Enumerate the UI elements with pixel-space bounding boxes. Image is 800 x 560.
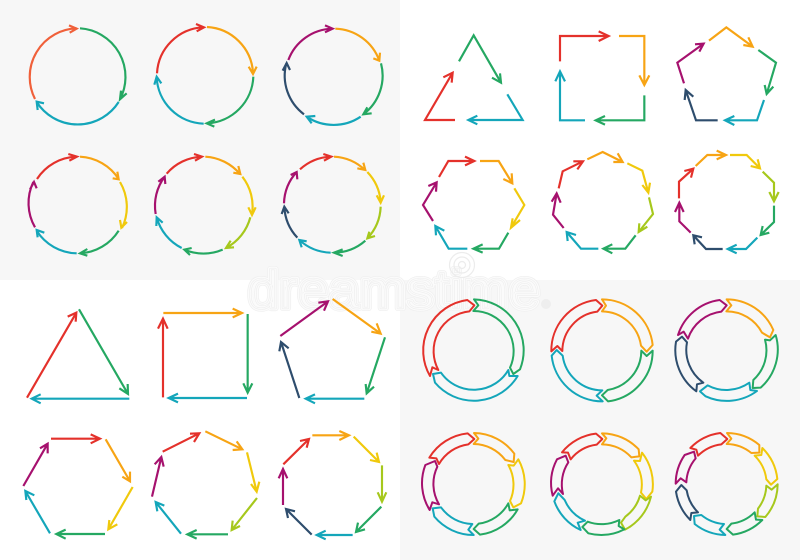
arrow: teal bbox=[37, 102, 119, 124]
arrow: teal bbox=[468, 94, 523, 124]
arrow: green bbox=[334, 241, 365, 256]
block arrow: red bbox=[423, 300, 474, 376]
block arrow: orange bbox=[602, 299, 653, 352]
diagram: circle with 5 arrows bbox=[283, 25, 383, 125]
arrow: green bbox=[80, 231, 119, 256]
block arrow: red bbox=[551, 300, 602, 351]
arrow: green bbox=[459, 35, 501, 83]
arrow: purple bbox=[29, 182, 37, 227]
arrow: red bbox=[425, 73, 455, 120]
arrow: teal bbox=[435, 226, 467, 249]
arrow: green bbox=[184, 248, 223, 255]
arrow: yellow bbox=[730, 155, 760, 168]
arrow: orange bbox=[80, 157, 119, 179]
diagram: circle with 6 arrows bbox=[29, 154, 127, 256]
arrow: purple bbox=[279, 469, 287, 505]
diagram: octagon bbox=[675, 151, 779, 253]
diagram: triangle bbox=[425, 35, 523, 124]
block arrow: green bbox=[727, 512, 762, 535]
arrow: teal bbox=[725, 100, 764, 125]
arrow: purple bbox=[155, 177, 165, 214]
arrow: navy bbox=[279, 342, 299, 398]
diagram: square bbox=[555, 31, 649, 125]
arrow: navy bbox=[693, 235, 723, 249]
arrow: teal bbox=[156, 502, 181, 534]
arrow: lime bbox=[226, 217, 250, 248]
arrow: green bbox=[603, 235, 636, 253]
arrow: red bbox=[300, 154, 331, 169]
arrow: green bbox=[366, 337, 385, 393]
arrow: orange bbox=[480, 161, 512, 183]
block arrow: red bbox=[690, 433, 727, 456]
diagram: ring with 3 block arrows bbox=[423, 299, 524, 401]
panel: top-left background bbox=[0, 0, 400, 280]
diagram: ring with 5 block arrows bbox=[675, 299, 778, 401]
panel: circular line arrows bbox=[29, 24, 384, 256]
arrow: teal bbox=[37, 230, 77, 253]
arrow: yellow bbox=[120, 182, 127, 228]
arrow: orange bbox=[207, 27, 257, 74]
diagram: ring with 7 block arrows bbox=[551, 433, 653, 535]
block arrow: teal bbox=[552, 350, 603, 401]
arrow: green bbox=[356, 507, 381, 532]
arrow: teal bbox=[306, 394, 364, 403]
block arrow: green bbox=[753, 335, 778, 388]
diagram: circle with 3 arrows bbox=[30, 25, 127, 124]
block arrow: green bbox=[474, 503, 518, 535]
diagram: ring with 6 block arrows bbox=[422, 433, 525, 535]
arrow: green bbox=[80, 28, 127, 99]
diagram: ring with 8 block arrows bbox=[676, 433, 778, 535]
arrow: yellow bbox=[247, 452, 259, 492]
arrow: green bbox=[79, 309, 128, 394]
panel: block arrow rings bbox=[422, 299, 778, 535]
arrow: orange bbox=[163, 309, 242, 317]
diagram: square bbox=[158, 309, 252, 402]
arrow: teal bbox=[728, 238, 757, 253]
block arrow: orange bbox=[726, 299, 773, 337]
diagram: hexagon bbox=[23, 434, 133, 539]
arrow: orange bbox=[619, 36, 649, 85]
block arrow: red bbox=[562, 434, 602, 459]
arrow: green bbox=[243, 314, 252, 393]
arrow: red bbox=[158, 319, 168, 397]
diagram: ring with 4 block arrows bbox=[551, 299, 653, 401]
arrow: orange bbox=[334, 157, 365, 170]
diagram: octagon bbox=[279, 431, 386, 539]
block arrow: teal bbox=[554, 493, 585, 530]
arrow: orange bbox=[205, 157, 240, 174]
arrow: yellow bbox=[511, 188, 524, 228]
arrow: orange bbox=[587, 152, 623, 162]
arrow: orange bbox=[312, 431, 349, 440]
arrow: purple bbox=[423, 182, 437, 221]
arrow: red bbox=[679, 169, 693, 198]
arrow: teal bbox=[156, 217, 182, 248]
arrow: purple bbox=[284, 172, 297, 203]
arrow: red bbox=[157, 24, 204, 73]
arrow: teal bbox=[567, 232, 598, 249]
arrow: green bbox=[758, 50, 776, 94]
arrow: green bbox=[187, 530, 228, 539]
diagram: circle with 8 arrows bbox=[282, 154, 384, 256]
watermark: dreamstime: dreamstime bbox=[248, 260, 540, 320]
arrow: red bbox=[163, 433, 199, 452]
arrow: teal bbox=[317, 531, 353, 539]
watermark: dreamstime: dreamstime bbox=[248, 260, 540, 320]
arrow: yellow bbox=[354, 437, 379, 462]
block arrow: yellow bbox=[508, 459, 525, 507]
block arrow: green bbox=[582, 520, 624, 535]
arrow: red bbox=[559, 161, 583, 188]
arrow: teal bbox=[32, 394, 129, 403]
arrow: green bbox=[207, 77, 253, 127]
watermark: dreamstime: dreamstime bbox=[248, 260, 540, 320]
diagram: pentagon bbox=[677, 27, 776, 125]
arrow: green bbox=[473, 233, 508, 253]
arrow: green bbox=[761, 206, 774, 235]
arrow: navy bbox=[685, 90, 718, 120]
watermark: dreamstime: dreamstime bbox=[248, 260, 540, 320]
arrow: teal bbox=[299, 240, 331, 253]
arrow: red bbox=[439, 157, 474, 177]
arrow: purple bbox=[288, 25, 333, 60]
block arrow: red bbox=[429, 433, 474, 464]
arrow: lime bbox=[639, 197, 653, 232]
block arrow: purple bbox=[678, 300, 727, 339]
arrow: red bbox=[27, 313, 76, 398]
arrow: navy bbox=[283, 63, 304, 114]
arrow: green bbox=[363, 63, 383, 114]
diagram: heptagon bbox=[152, 431, 259, 539]
diagram: circle with 4 arrows bbox=[154, 24, 257, 127]
arrow: teal bbox=[307, 116, 361, 125]
block arrow: yellow bbox=[755, 448, 777, 485]
arrow: purple bbox=[23, 444, 48, 486]
arrow: orange bbox=[709, 27, 753, 47]
block arrow: lime bbox=[757, 484, 778, 517]
diagram: heptagon bbox=[552, 152, 653, 253]
arrow: lime bbox=[367, 207, 381, 238]
block arrow: purple bbox=[551, 456, 568, 496]
arrow: yellow bbox=[367, 172, 384, 203]
block arrow: teal bbox=[433, 507, 474, 535]
panel: straight line arrows bbox=[23, 299, 386, 539]
arrow: purple bbox=[677, 44, 704, 83]
block arrow: green bbox=[602, 351, 653, 401]
arrow: lime bbox=[378, 465, 386, 502]
diagram: triangle bbox=[27, 309, 129, 403]
arrow: teal bbox=[555, 71, 585, 120]
block arrow: purple bbox=[422, 461, 439, 510]
block arrow: purple bbox=[676, 452, 696, 484]
arrow: green bbox=[596, 95, 644, 125]
arrow: purple bbox=[552, 193, 564, 228]
arrow: lime bbox=[763, 172, 779, 201]
block arrow: teal bbox=[433, 370, 518, 401]
block arrow: orange bbox=[474, 433, 514, 462]
arrow: red bbox=[560, 31, 609, 61]
arrow: purple bbox=[152, 457, 164, 497]
arrow: coral bbox=[30, 25, 77, 99]
arrow: orange bbox=[205, 431, 242, 450]
panel: polygon corner arrows bbox=[423, 27, 779, 253]
arrow: yellow bbox=[242, 177, 256, 215]
diagram: circle with 7 arrows bbox=[155, 154, 256, 255]
arrow: orange bbox=[333, 299, 381, 334]
block arrow: teal bbox=[694, 515, 725, 535]
panel: bottom-right background bbox=[400, 280, 800, 560]
arrow: yellow bbox=[627, 163, 650, 193]
block arrow: orange bbox=[727, 433, 759, 453]
arrow: red bbox=[283, 439, 309, 464]
arrow: orange bbox=[106, 439, 130, 481]
arrow: green bbox=[56, 530, 105, 539]
arrow: yellow bbox=[108, 487, 133, 529]
block arrow: navy bbox=[675, 337, 703, 391]
block arrow: lime bbox=[621, 496, 651, 530]
arrow: red bbox=[51, 434, 100, 443]
arrow: purple bbox=[675, 203, 691, 233]
arrow: teal bbox=[169, 394, 247, 402]
diagram: hexagon bbox=[423, 157, 524, 253]
arrow: orange bbox=[335, 29, 380, 61]
arrow: teal bbox=[154, 77, 204, 124]
arrow: lime bbox=[232, 498, 257, 530]
arrow: teal bbox=[25, 491, 50, 533]
diagram: pentagon bbox=[279, 299, 385, 403]
block arrow: green bbox=[473, 299, 524, 374]
arrow: red bbox=[167, 154, 202, 174]
block arrow: orange bbox=[602, 433, 639, 457]
block arrow: yellow bbox=[634, 453, 653, 499]
block arrow: navy bbox=[676, 485, 698, 520]
block arrow: teal bbox=[700, 383, 757, 401]
arrow: red bbox=[37, 154, 77, 179]
arrow: navy bbox=[286, 509, 312, 535]
arrow: navy bbox=[282, 207, 297, 238]
arrow: orange bbox=[696, 151, 726, 166]
arrow: purple bbox=[280, 301, 328, 336]
